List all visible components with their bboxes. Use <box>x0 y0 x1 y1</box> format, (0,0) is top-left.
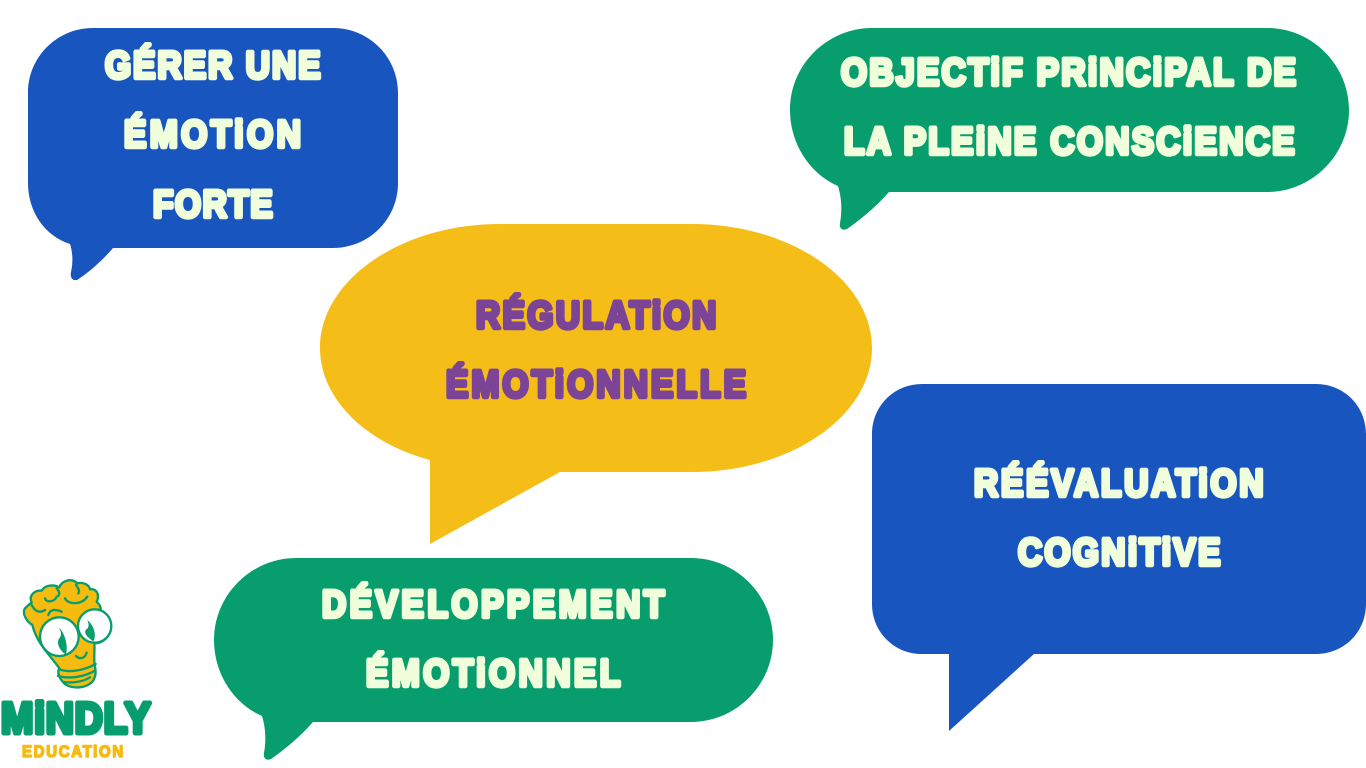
label: régulation émotionnelle: RÉGULATiON <box>476 294 716 336</box>
label: développement émotionnel: DÉVELOPPEMENT <box>322 583 664 625</box>
label: gérer une émotion forte <box>105 44 321 225</box>
label: régulation émotionnelle <box>446 294 746 405</box>
label: objectif principal de la pleine conscience: LA PLEiNE CONSCiENCE <box>844 120 1295 162</box>
wordmark: Mindly: MiNDLY <box>1 693 151 743</box>
speech bubble: développement émotionnel <box>214 558 773 760</box>
label: développement émotionnel <box>322 583 664 694</box>
speech bubble: réévaluation cognitive <box>872 384 1366 731</box>
label: réévaluation cognitive: COGNiTiVE <box>1018 531 1220 573</box>
speech bubble: objectif principal de la pleine conscience <box>790 28 1349 230</box>
label: objectif principal de la pleine conscience: OBJECTiF PRiNCiPAL DE <box>841 51 1296 93</box>
label: réévaluation cognitive: RÉÉVALUATiON <box>974 462 1264 504</box>
label: gérer une émotion forte: ÉMOTiON <box>124 113 301 155</box>
label: gérer une émotion forte: FORTE <box>153 183 273 225</box>
logo: Mindly Education <box>1 580 151 761</box>
label: régulation émotionnelle: ÉMOTiONNELLE <box>446 363 746 405</box>
wordmark: Education: EDUCATiON <box>22 743 123 761</box>
label: réévaluation cognitive <box>974 462 1264 573</box>
label: développement émotionnel: ÉMOTiONNEL <box>366 652 620 694</box>
label: objectif principal de la pleine conscience <box>841 51 1296 162</box>
label: gérer une émotion forte: GÉRER UNE <box>105 44 321 86</box>
speech bubble: régulation émotionnelle <box>320 224 872 544</box>
icon: light bulb mascot <box>24 580 111 687</box>
speech bubble: gérer une émotion forte <box>28 28 398 280</box>
